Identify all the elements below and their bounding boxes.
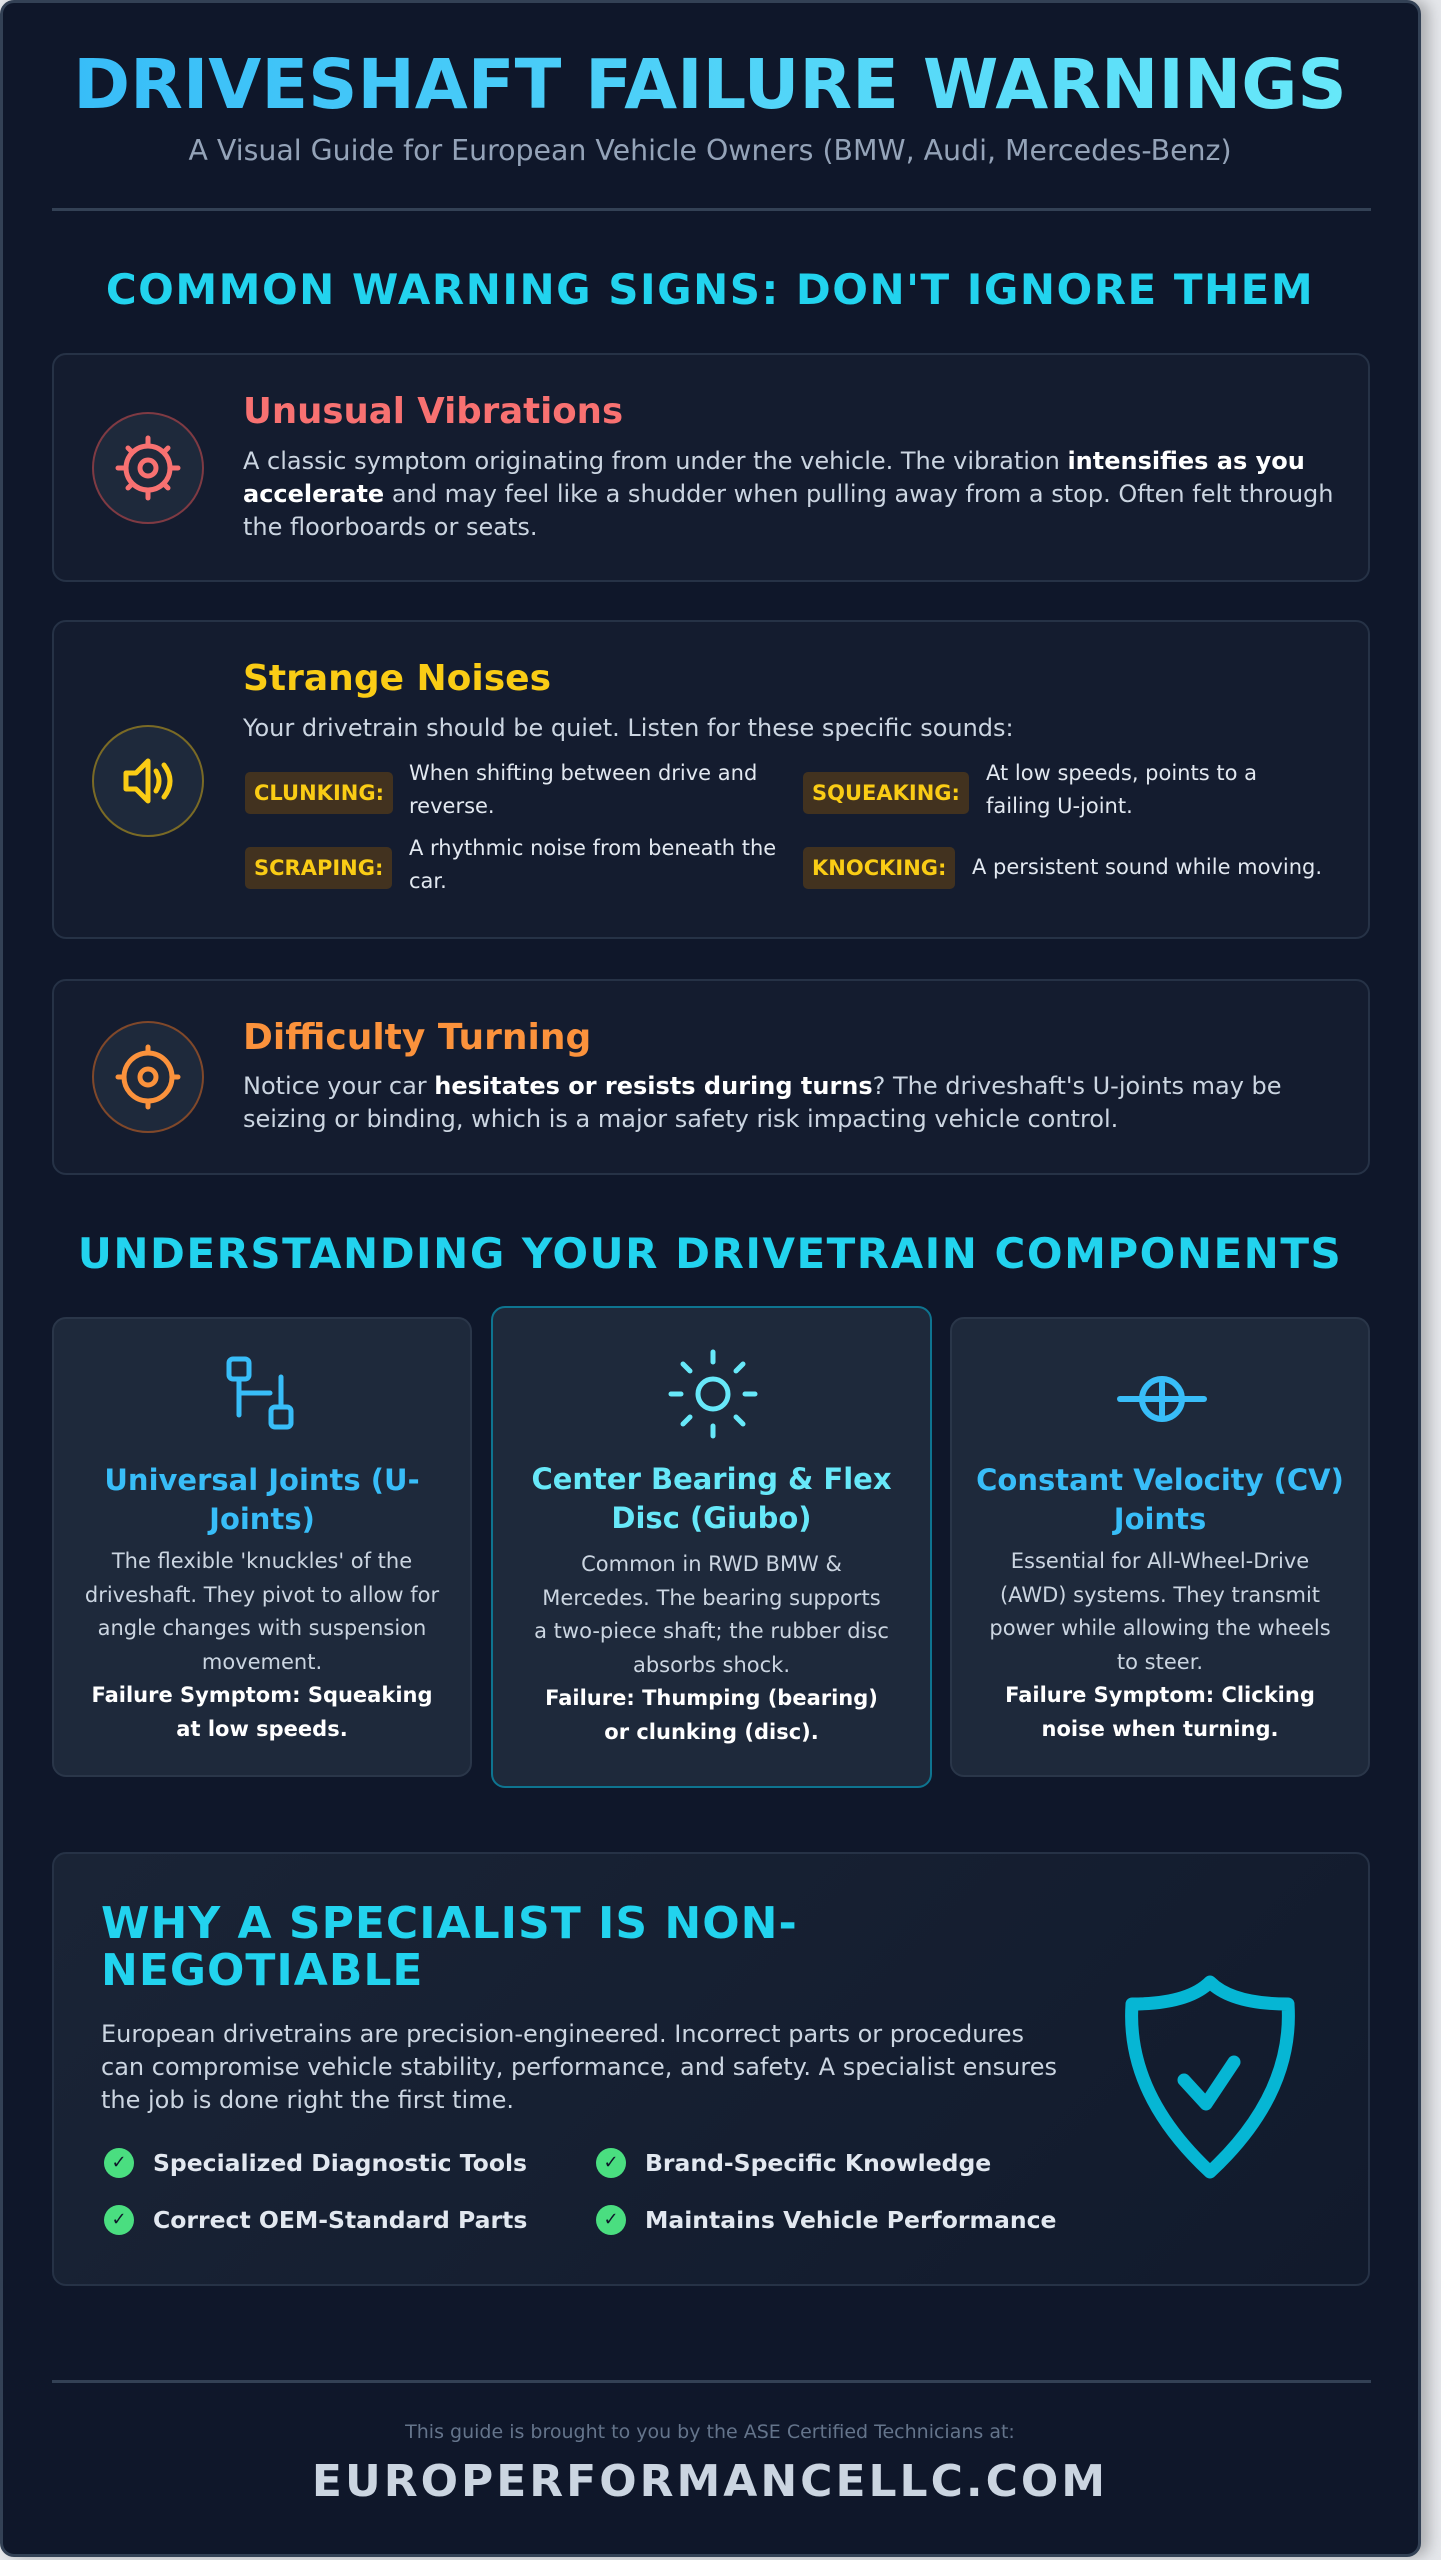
icon: bearing sun (668, 1350, 758, 1438)
heading: Strange Noises (243, 658, 551, 699)
panel: center bearing (491, 1306, 932, 1788)
checklist: ✓ (111, 2209, 127, 2230)
heading: WHY A SPECIALIST IS NON-NEGOTIABLE (101, 1898, 798, 1996)
item: Correct OEM-Standard Parts (153, 2206, 527, 2234)
text: Notice your car hesitates or resists during turns? The driveshaft's U-joints may be seizing or binding, which is a major safety risk impacting vehicle control. (243, 1072, 1282, 1133)
icon: shield check (1125, 1976, 1295, 2178)
subtitle: A Visual Guide for European Vehicle Owners (BMW, Audi, Mercedes-Benz) (188, 134, 1232, 167)
sound: scraping: SCRAPING: (254, 856, 383, 880)
panel: strange noises: At low speeds, points to a failing U-joint. (986, 761, 1257, 818)
panel: unusual vibrations (52, 353, 1370, 582)
text: European drivetrains are precision-engineered. Incorrect parts or procedures can compromise vehicle stability, performance, and safety. A specialist ensures the job is done right the first time. (101, 2020, 1057, 2114)
sound: knocking (803, 847, 955, 889)
text: Failure Symptom: Squeaking at low speeds. (92, 1683, 432, 1740)
footer website: EUROPERFORMANCELLC.COM (312, 2456, 1108, 2507)
intro text: Your drivetrain should be quiet. Listen for these specific sounds: (243, 714, 1014, 742)
item: Specialized Diagnostic Tools (153, 2149, 527, 2177)
text: Essential for All-Wheel-Drive (AWD) systems. They transmit power while allowing the wheels to steer. (989, 1549, 1331, 1674)
text: Common in RWD BMW & Mercedes. The bearing supports a two-piece shaft; the rubber disc absorbs shock. (534, 1552, 889, 1676)
icon: u-joint (226, 1356, 294, 1430)
text: The flexible 'knuckles' of the driveshaft. They pivot to allow for angle changes with suspension movement. (85, 1549, 439, 1674)
section heading: components: UNDERSTANDING YOUR DRIVETRAIN COMPONENTS (78, 1229, 1342, 1278)
checklist: ✓ (603, 2209, 619, 2230)
text (989, 1549, 1331, 1740)
panel: difficulty turning (52, 979, 1370, 1175)
icon: speaker (92, 725, 204, 837)
section heading: warning signs: COMMON WARNING SIGNS: DON'T IGNORE THEM (106, 265, 1314, 314)
panel: strange noises: When shifting between drive and reverse. (409, 761, 757, 818)
text: Failure Symptom: Clicking noise when turning. (1005, 1683, 1315, 1740)
sound: squeaking (803, 772, 969, 814)
heading: Constant Velocity (CV) Joints (976, 1463, 1344, 1536)
panel: strange noises: A rhythmic noise from beneath the car. (409, 836, 776, 893)
sound: scraping (245, 847, 392, 889)
heading: Difficulty Turning (243, 1017, 591, 1058)
heading: Center Bearing & Flex Disc (Giubo) (531, 1462, 892, 1535)
icon: vibration gear (92, 412, 204, 524)
checklist: ✓ (111, 2152, 127, 2173)
sound: clunking (245, 772, 393, 814)
text (534, 1552, 889, 1744)
text: A classic symptom originating from under the vehicle. The vibration intensifies as you accelerate and may feel like a shudder when pulling away from a stop. Often felt through the floorboards or seats. (243, 447, 1334, 541)
panel: u-joints (52, 1317, 472, 1777)
icon: cv joint (1117, 1376, 1207, 1422)
panel: why a specialist (52, 1852, 1370, 2286)
text: Failure: Thumping (bearing) or clunking (disc). (545, 1686, 878, 1744)
footer note: This guide is brought to you by the ASE Certified Technicians at: (405, 2421, 1015, 2443)
icon: steering target (92, 1021, 204, 1133)
sound: knocking: KNOCKING: (812, 856, 946, 880)
title: DRIVESHAFT FAILURE WARNINGS (73, 45, 1347, 125)
sound: squeaking: SQUEAKING: (812, 781, 960, 805)
text (85, 1549, 440, 1740)
heading: Unusual Vibrations (243, 391, 623, 432)
sound: clunking: CLUNKING: (254, 781, 384, 805)
item: Brand-Specific Knowledge (645, 2149, 991, 2177)
panel: strange noises (52, 620, 1370, 939)
item: Maintains Vehicle Performance (645, 2206, 1056, 2234)
heading: Universal Joints (U-Joints) (104, 1463, 420, 1536)
checklist (104, 2148, 1056, 2235)
checklist: ✓ (603, 2152, 619, 2173)
panel: strange noises: A persistent sound while moving. (972, 855, 1322, 879)
panel: cv joints (950, 1317, 1370, 1777)
